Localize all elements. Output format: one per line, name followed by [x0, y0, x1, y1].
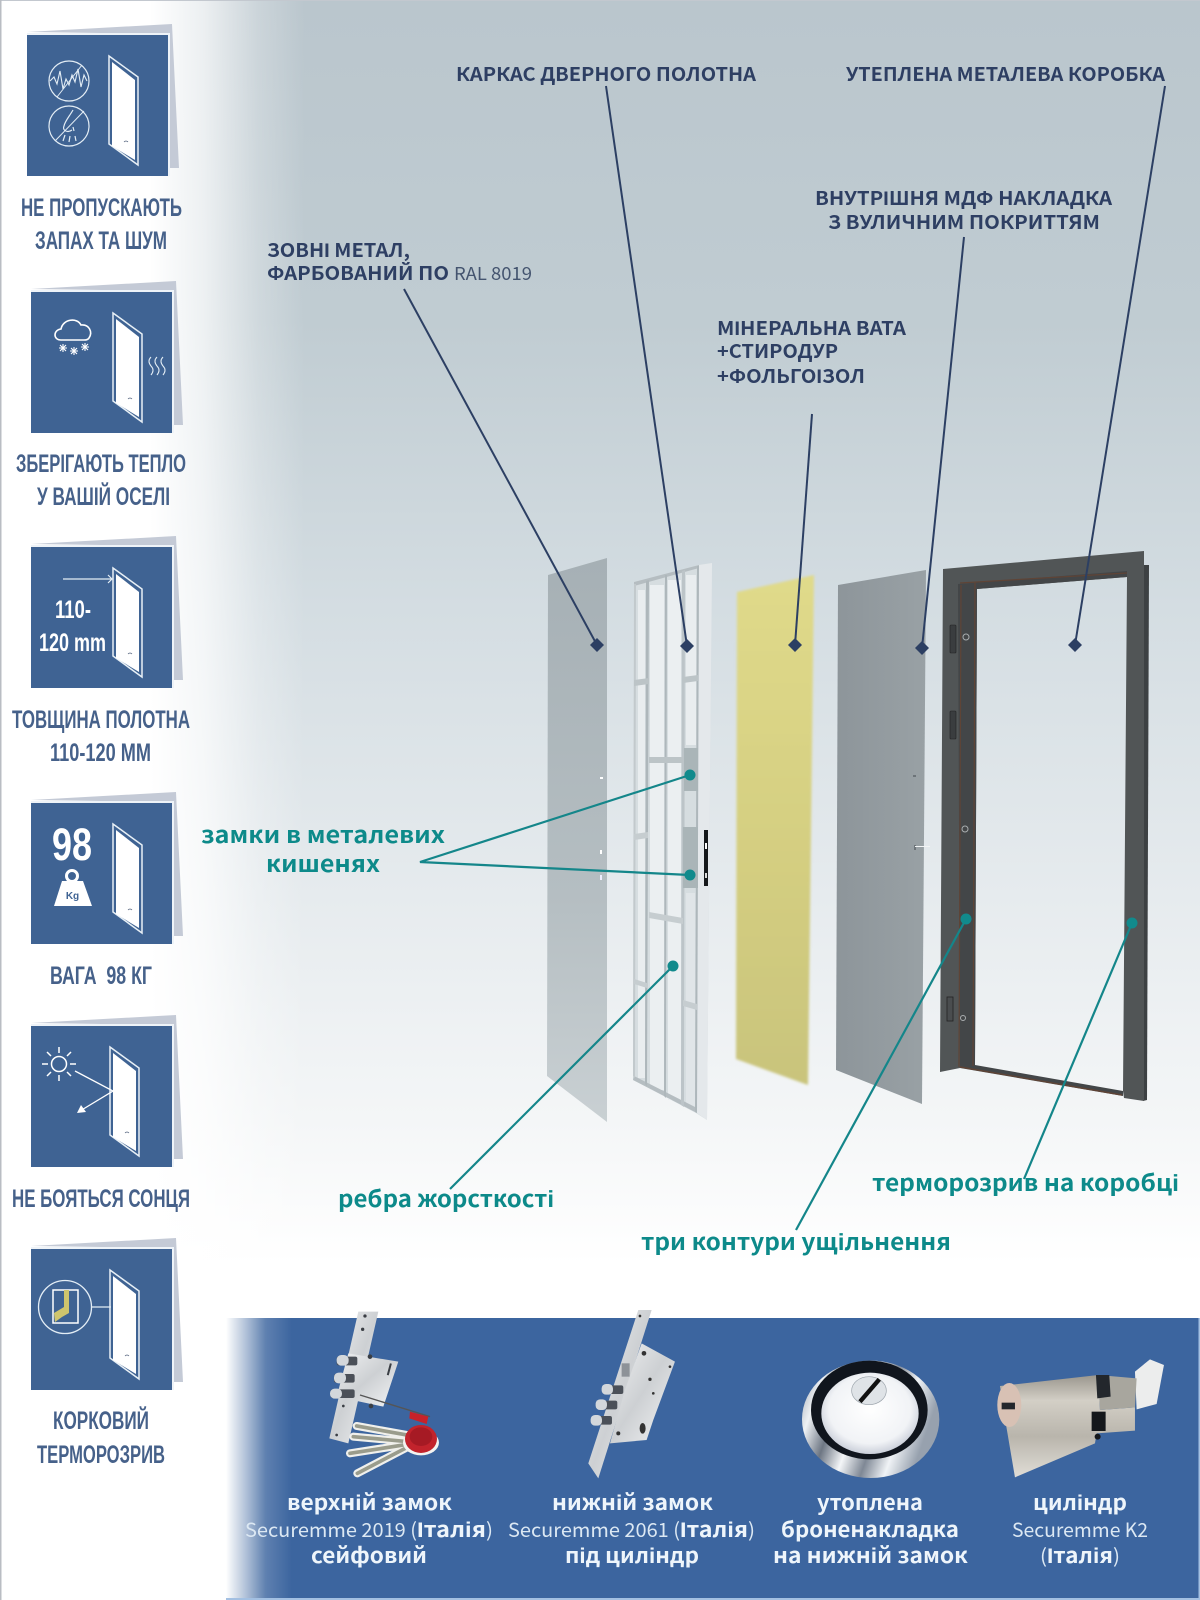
caption: armor plate: [773, 1487, 968, 1570]
caption: cylinder: Італія: [1047, 1540, 1113, 1570]
leader lines: dark: [404, 86, 1165, 648]
caption: upper lock: Італія: [417, 1514, 486, 1544]
caption: upper lock: сейфовий: [311, 1540, 427, 1570]
label: locks in metal pockets: замки в металевих: [201, 816, 445, 850]
caption: cork thermal break: ТЕРМОРОЗРИВ: [37, 1441, 165, 1469]
caption: upper lock: Securemme 2019 (: [245, 1514, 417, 1543]
icon: heat: [31, 281, 183, 433]
panel: mineral wool insulation: [736, 575, 814, 1085]
label: locks in metal pockets: [201, 816, 445, 879]
label: locks in metal pockets: кишенях: [266, 845, 380, 879]
caption: lower lock: ): [748, 1514, 755, 1543]
caption: thickness: 110-120 ММ: [50, 739, 151, 767]
caption: heat: ЗБЕРІГАЮТЬ ТЕПЛО: [16, 450, 186, 478]
image: cylinder: [997, 1359, 1164, 1477]
caption: armor plate: утоплена: [817, 1487, 923, 1517]
caption: smell and noise: [21, 194, 182, 255]
label: three seal contours: три контури ущільнення: [641, 1223, 951, 1257]
caption: smell and noise: ЗАПАХ ТА ШУМ: [35, 227, 167, 255]
caption: thickness: ТОВЩИНА ПОЛОТНА: [12, 706, 190, 734]
icon: smell and noise: [27, 24, 179, 176]
label: mineral wool: [717, 314, 907, 389]
icon: cork thermal break: [31, 1238, 183, 1390]
caption: cylinder: циліндр: [1033, 1487, 1127, 1517]
caption: cylinder: [1012, 1487, 1148, 1570]
label: thermal break on box: терморозрив на коробці: [872, 1164, 1179, 1198]
icon: thickness: 120 mm: [39, 629, 106, 657]
label: stiffening ribs: ребра жорсткості: [338, 1180, 554, 1214]
caption: heat: [16, 450, 186, 511]
icon: weight: [31, 792, 183, 944]
image: upper lock with keys: [329, 1312, 439, 1473]
label: mineral wool: +СТИРОДУР: [717, 337, 838, 364]
caption: sun: НЕ БОЯТЬСЯ СОНЦЯ: [12, 1185, 190, 1213]
label: inner MDF overlay: З ВУЛИЧНИМ ПОКРИТТЯМ: [828, 208, 1100, 235]
caption: lower lock: Securemme 2061 (: [508, 1514, 680, 1543]
panel: door leaf frame: [633, 563, 712, 1120]
image: lower lock: [588, 1310, 675, 1478]
caption: cylinder: Securemme K2: [1012, 1514, 1148, 1543]
label: outer painted metal: ФАРБОВАНИЙ ПО: [267, 259, 449, 286]
markers: dark diamonds: [590, 638, 1082, 655]
caption: weight: ВАГА 98 КГ: [50, 962, 152, 990]
caption: heat: У ВАШІЙ ОСЕЛІ: [37, 481, 170, 511]
caption: cork thermal break: КОРКОВИЙ: [53, 1405, 149, 1435]
label: outer painted metal: RAL 8019: [454, 260, 532, 286]
caption: lower lock: [508, 1487, 755, 1570]
caption: cylinder: ): [1113, 1540, 1120, 1569]
icon: weight: 98: [52, 819, 92, 870]
label: insulated metal box: УТЕПЛЕНА МЕТАЛЕВА КОРОБКА: [846, 60, 1166, 87]
label: mineral wool: МІНЕРАЛЬНА ВАТА: [717, 314, 907, 341]
label: mineral wool: +ФОЛЬГОІЗОЛ: [717, 362, 865, 389]
label: inner MDF overlay: ВНУТРІШНЯ МДФ НАКЛАДКА: [815, 184, 1113, 211]
panel: hardware band: [226, 1318, 1200, 1600]
caption: smell and noise: НЕ ПРОПУСКАЮТЬ: [21, 194, 182, 222]
icon: sun: [31, 1015, 183, 1167]
icon: thickness: [31, 536, 183, 688]
label: outer painted metal: ЗОВНІ МЕТАЛ,: [267, 236, 410, 263]
caption: thickness: [12, 706, 190, 767]
caption: lower lock: Італія: [680, 1514, 748, 1544]
caption: lower lock: під циліндр: [565, 1540, 699, 1570]
leader lines: teal: [420, 775, 1132, 1230]
caption: upper lock: верхній замок: [287, 1487, 452, 1517]
label: door leaf frame: КАРКАС ДВЕРНОГО ПОЛОТНА: [456, 60, 757, 87]
caption: upper lock: [245, 1487, 493, 1570]
label: inner MDF overlay: [815, 184, 1113, 235]
panel: inner MDF overlay: [836, 570, 930, 1104]
panel: outer painted metal sheet: [547, 558, 607, 1122]
label: outer painted metal: [267, 236, 532, 286]
icon: weight: Kg: [66, 891, 79, 902]
caption: cylinder: (: [1040, 1540, 1047, 1569]
caption: upper lock: ): [486, 1514, 493, 1543]
caption: armor plate: броненакладка: [781, 1514, 959, 1544]
caption: cork thermal break: [37, 1405, 165, 1469]
caption: lower lock: нижній замок: [552, 1487, 713, 1517]
panel: insulated metal box frame: [940, 551, 1149, 1101]
caption: armor plate: на нижній замок: [773, 1540, 968, 1570]
image: recessed armor plate: [802, 1361, 939, 1478]
icon: thickness: 110-: [55, 596, 91, 624]
markers: teal dots: [668, 770, 1138, 972]
